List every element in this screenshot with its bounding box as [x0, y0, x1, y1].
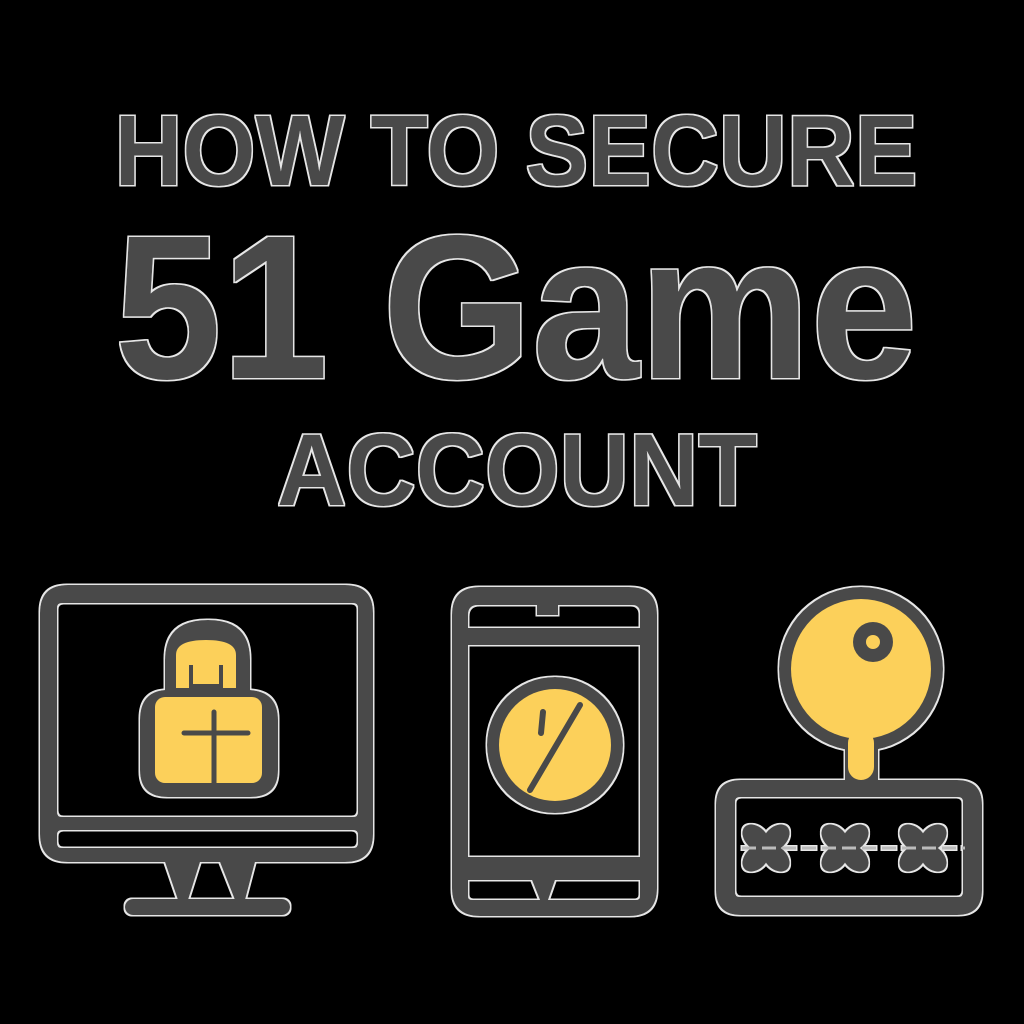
icon: key with password — [716, 587, 982, 915]
title line 2: 51 Game — [114, 193, 918, 422]
password asterisks — [724, 806, 965, 890]
title line 3: ACCOUNT — [277, 413, 757, 527]
title line 1: HOW TO SECURE — [114, 95, 918, 207]
title — [114, 95, 918, 527]
icon: monitor with lock — [40, 585, 373, 915]
icon: phone with blocked symbol — [452, 587, 657, 916]
lock — [140, 620, 278, 797]
